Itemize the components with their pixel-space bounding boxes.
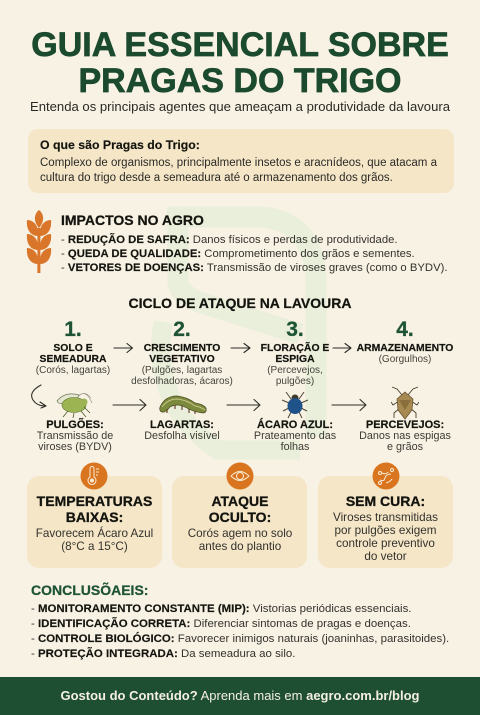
step 4: 4. <box>396 318 414 341</box>
pest: pulgoes <box>37 418 113 453</box>
icon: blue mite <box>282 392 308 418</box>
card text: por pulgões exigem <box>334 524 437 537</box>
panel: ataque oculto <box>172 476 307 568</box>
icon: thermometer <box>80 462 108 490</box>
icon: stink bug <box>391 386 419 420</box>
step 2 <box>131 318 233 387</box>
step 1: (Corós, lagartas) <box>36 365 110 376</box>
pest: percevejos: e grãos <box>387 441 423 453</box>
card text: (8°C a 15°C) <box>61 540 128 553</box>
conclusions list: - MONITORAMENTO CONSTANTE (MIP): Vistorias periódicas essenciais. <box>31 603 412 615</box>
panel: definition <box>28 129 454 193</box>
impacts list <box>61 233 448 274</box>
step 1: SEMEADURA <box>40 354 106 365</box>
title: GUIA ESSENCIAL SOBRE <box>31 26 449 64</box>
pest: percevejos: PERCEVEJOS: <box>366 419 444 431</box>
step 3: 3. <box>286 318 304 341</box>
icon: virus <box>372 462 400 490</box>
card heading <box>209 493 271 524</box>
footer text: Gostou do Conteúdo? Aprenda mais em aegro.com.br/blog <box>60 688 420 703</box>
step 2: desfolhadoras, ácaros) <box>131 376 233 387</box>
card text: Corós agem no solo <box>188 527 292 540</box>
card text: Viroses transmitidas <box>333 511 438 524</box>
icon: wheat <box>26 210 52 273</box>
pest: pulgoes: PULGÕES: <box>46 419 104 431</box>
card text <box>188 527 292 553</box>
step 1 <box>36 318 110 376</box>
title: PRAGAS DO TRIGO <box>78 62 402 100</box>
pest: lagartas: LAGARTAS: <box>150 419 214 431</box>
card text: antes do plantio <box>199 540 281 553</box>
icon: aphid <box>56 393 92 418</box>
conclusions list: - CONTROLE BIOLÓGICO: Favorecer inimigos naturais (joaninhas, parasitoides). <box>31 633 449 645</box>
pest: lagartas: Desfolha visível <box>144 430 220 442</box>
card heading: OCULTO: <box>209 508 271 524</box>
step 1: SOLO E <box>53 342 93 354</box>
step 2: (Pulgões, lagartas <box>142 365 222 376</box>
pest: lagartas <box>144 419 220 442</box>
icon: eye <box>226 462 254 490</box>
pest: acaro azul: folhas <box>281 441 309 453</box>
definition heading: O que são Pragas do Trigo: <box>40 138 200 152</box>
pest: percevejos: Danos nas espigas <box>359 430 451 442</box>
step 4: ARMAZENAMENTO <box>357 342 453 354</box>
step 2: CRESCIMENTO <box>144 342 220 354</box>
subtitle: Entenda os principais agentes que ameaçam a produtividade da lavoura <box>30 99 450 114</box>
card heading: ATAQUE <box>211 493 269 509</box>
step 4: (Gorgulhos) <box>379 354 431 364</box>
card heading: BAIXAS: <box>66 508 123 524</box>
conclusions list: - PROTEÇÃO INTEGRADA: Da semeadura ao silo. <box>31 648 295 660</box>
card text: controle preventivo <box>336 537 435 550</box>
conclusions heading: CONCLUSÕAEIS: <box>31 582 148 598</box>
panel: temperaturas baixas <box>27 476 162 568</box>
card text <box>36 526 153 553</box>
arrows <box>31 342 366 412</box>
pest: acaro azul <box>254 418 336 453</box>
impacts heading: IMPACTOS NO AGRO <box>61 212 204 228</box>
definition text <box>40 157 437 184</box>
card text: do vetor <box>364 550 407 563</box>
step 1: 1. <box>64 318 82 341</box>
conclusions list: - IDENTIFICAÇÃO CORRETA: Diferenciar sintomas de pragas e doenças. <box>31 618 411 630</box>
panel: sem cura <box>318 476 453 568</box>
pest: acaro azul: Prateamento das <box>254 430 336 442</box>
pest: percevejos <box>359 419 451 453</box>
step 3 <box>261 318 329 387</box>
step 3: ESPIGA <box>275 354 315 365</box>
footer <box>0 677 480 715</box>
card text: Favorecem Ácaro Azul <box>36 527 153 540</box>
step 3: (Percevejos, <box>267 365 323 376</box>
impacts list: - VETORES DE DOENÇAS: Transmissão de viroses graves (como o BYDV). <box>61 262 448 274</box>
step 2: VEGETATIVO <box>149 354 215 365</box>
step 4 <box>356 318 453 364</box>
step 3: pulgões) <box>276 376 314 387</box>
icon: caterpillar <box>159 396 207 414</box>
pest: pulgoes: Transmissão de <box>37 430 113 442</box>
card heading <box>36 493 152 524</box>
card heading: SEM CURA: <box>346 493 425 509</box>
cycle heading: CICLO DE ATAQUE NA LAVOURA <box>129 295 351 311</box>
title <box>31 26 449 100</box>
definition text: Complexo de organismos, principalmente insetos e aracnídeos, que atacam a <box>40 157 437 169</box>
pest: pulgoes: viroses (BYDV) <box>38 441 112 453</box>
impacts list: - REDUÇÃO DE SAFRA: Danos físicos e perdas de produtividade. <box>61 234 398 246</box>
definition text: cultura do trigo desde a semeadura até o armazenamento dos grãos. <box>40 172 393 184</box>
step 2: 2. <box>173 318 191 341</box>
step 3: FLORAÇÃO E <box>261 342 329 354</box>
card text <box>333 511 438 563</box>
card heading: TEMPERATURAS <box>37 493 152 509</box>
conclusions list <box>31 603 449 660</box>
pest: acaro azul: ÁCARO AZUL: <box>257 419 333 431</box>
impacts list: - QUEDA DE QUALIDADE: Comprometimento dos grãos e sementes. <box>61 248 415 260</box>
